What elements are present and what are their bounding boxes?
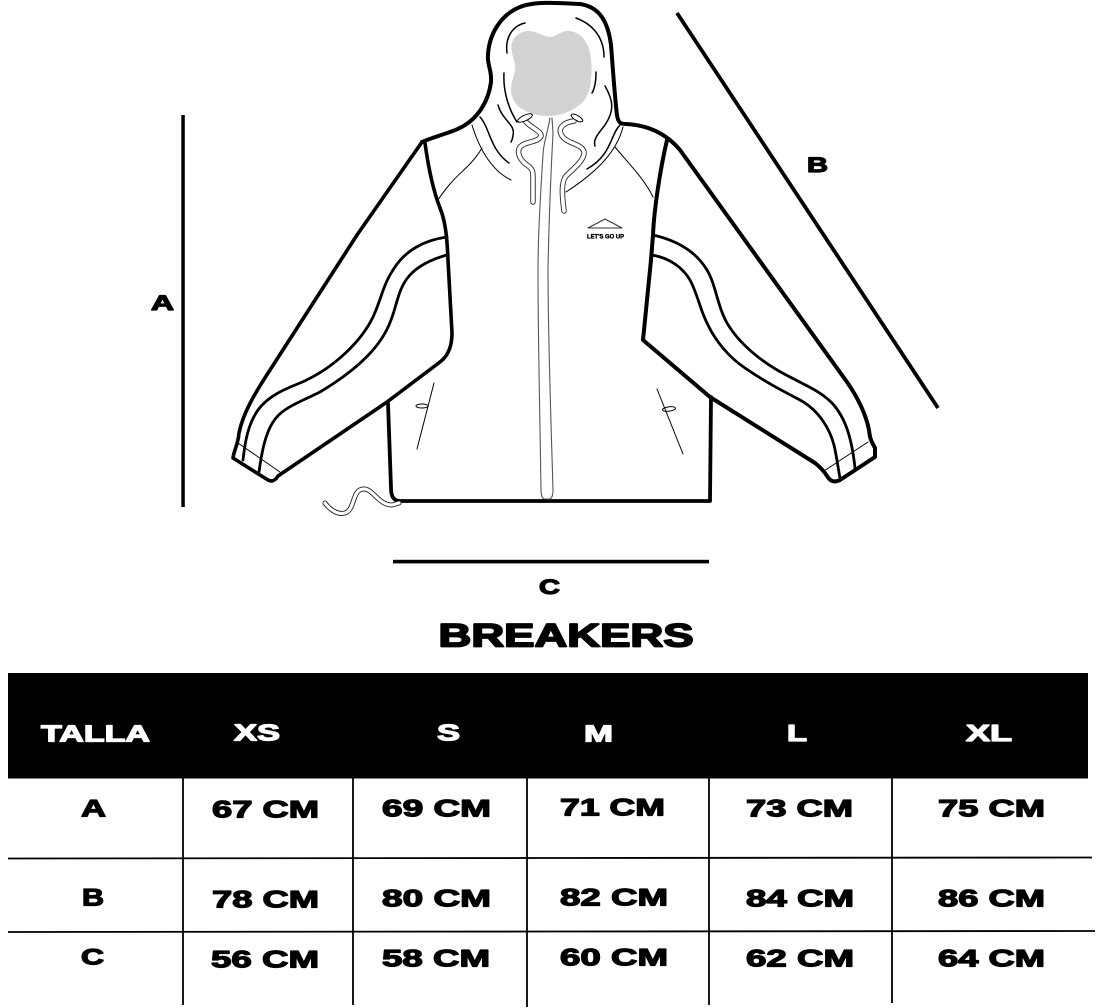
header labels: L	[787, 720, 807, 746]
hood inner folds	[480, 18, 620, 169]
row B: 82 CM	[560, 884, 668, 912]
hood and right sleeve outline	[422, 3, 875, 481]
left sleeve stripes	[243, 237, 447, 472]
measure line A	[181, 115, 185, 507]
row B: 80 CM	[382, 886, 491, 912]
row B: 86 CM	[938, 886, 1045, 912]
measure label C: C	[539, 576, 560, 599]
row C	[81, 944, 1045, 974]
measure label B: B	[807, 154, 828, 177]
title: BREAKERS	[438, 618, 694, 654]
measure line B	[677, 13, 938, 408]
hem drawcord	[325, 489, 399, 513]
left pocket	[416, 383, 434, 449]
row A: 73 CM	[746, 796, 853, 822]
cuff seams	[238, 442, 868, 472]
measure line C	[393, 560, 709, 563]
row C: 58 CM	[382, 946, 490, 972]
table header band	[8, 673, 1088, 778]
right pocket	[657, 389, 683, 454]
row A: 75 CM	[938, 796, 1045, 822]
row C: 62 CM	[746, 946, 854, 972]
header labels	[41, 720, 1012, 746]
raglan seams	[438, 147, 653, 200]
header labels: XS	[234, 720, 280, 746]
left sleeve outline	[233, 142, 452, 481]
logo text: LET'S GO UP	[587, 234, 625, 240]
zipper	[538, 118, 553, 499]
row B	[82, 884, 1045, 914]
row B: 84 CM	[746, 886, 854, 912]
row C: 60 CM	[560, 944, 668, 972]
jacket illustration	[233, 3, 875, 513]
header labels: S	[437, 720, 460, 746]
row C: 56 CM	[211, 946, 319, 974]
row C: C	[81, 944, 104, 970]
table grid lines	[8, 778, 1095, 1007]
row B: B	[82, 884, 104, 912]
row A: A	[81, 796, 106, 822]
left drawcord	[517, 112, 541, 202]
size table	[8, 673, 1095, 1007]
logo triangle	[588, 219, 622, 228]
row A: 71 CM	[560, 794, 665, 822]
collar seams	[472, 125, 623, 192]
header labels: XL	[966, 720, 1012, 746]
header labels: TALLA	[41, 720, 150, 746]
row A	[81, 794, 1045, 824]
face opening grey	[511, 31, 592, 116]
row A: 69 CM	[382, 796, 491, 822]
measure label A: A	[151, 292, 174, 315]
row A: 67 CM	[212, 796, 319, 824]
header labels: M	[584, 720, 613, 746]
row C: 64 CM	[938, 946, 1045, 972]
right sleeve stripes	[652, 235, 855, 478]
right drawcord	[560, 113, 584, 211]
row B: 78 CM	[212, 886, 319, 914]
jacket hem	[388, 397, 711, 501]
